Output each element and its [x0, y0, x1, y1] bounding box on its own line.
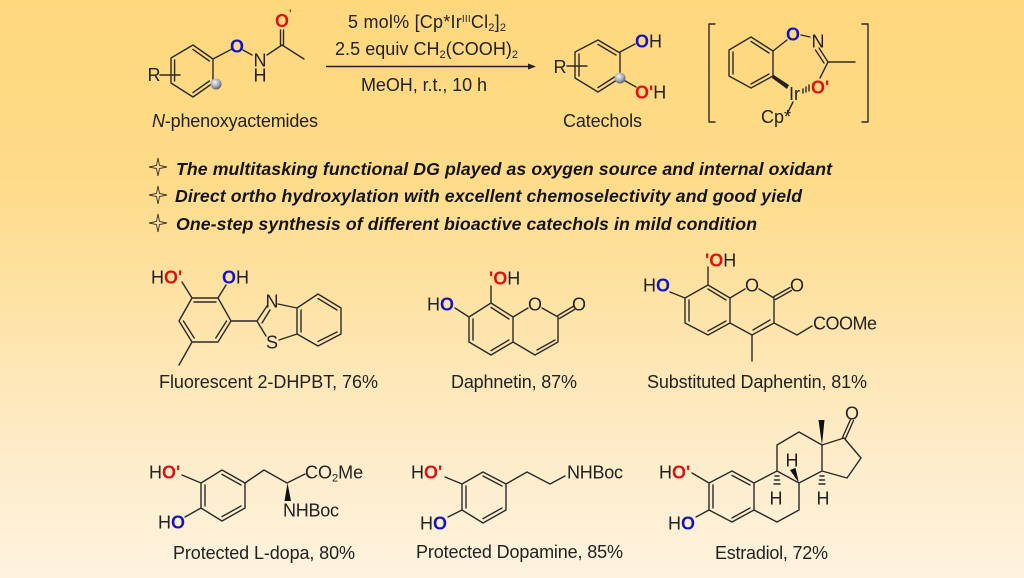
compound: protected L-dopa structure: [149, 462, 363, 532]
compound: estradiol derivative structure: HO: [668, 514, 695, 534]
compound: substituted daphnetin structure: COOMe: [813, 314, 877, 334]
compound: 2-DHPBT structure: [151, 268, 341, 365]
intermediate: bracketed iridacycle: Ir: [789, 84, 800, 104]
compound: protected L-dopa structure: Me: [338, 462, 363, 482]
compound: 2-DHPBT structure: HO': [151, 268, 182, 288]
arrow head: [528, 64, 536, 70]
intermediate: bracketed iridacycle: [709, 24, 868, 127]
key point 2: Direct ortho hydroxylation with excellent chemoselectivity and good yield: [175, 186, 803, 206]
product: catechol structure: R: [554, 57, 566, 77]
intermediate: bracketed iridacycle: O': [811, 78, 829, 98]
compound: estradiol derivative structure: H: [770, 488, 782, 508]
reaction conditions above arrow: ]: [495, 12, 500, 32]
compound: estradiol derivative structure: H: [786, 450, 798, 470]
compound: substituted daphnetin structure: HO: [643, 276, 670, 296]
compound: estradiol derivative structure: HO': [659, 462, 690, 482]
compound: estradiol derivative structure: O: [845, 404, 859, 424]
label: L-dopa yield: Protected L-dopa, 80%: [173, 543, 355, 563]
compound: protected L-dopa structure: NHBoc: [283, 500, 339, 520]
reactant: N-phenoxyacetamide structure: [148, 8, 304, 97]
reactant: N-phenoxyacetamide structure: ': [289, 8, 292, 20]
compound: 2-DHPBT structure: OH: [222, 268, 249, 288]
product: catechol structure: O'H: [635, 82, 666, 102]
intermediate: bracketed iridacycle: Cp*: [761, 107, 791, 127]
reaction conditions above arrow: Cl: [471, 12, 488, 32]
compound: protected L-dopa structure: HO': [149, 462, 180, 482]
compound: substituted daphnetin structure: O: [790, 276, 804, 296]
reactant: N-phenoxyacetamide structure: R: [148, 65, 160, 85]
compound: daphnetin structure: 'OH: [489, 268, 520, 288]
reaction conditions above arrow: III: [462, 14, 471, 25]
key point 1: The multitasking functional DG played as oxygen source and internal oxidant: [176, 159, 833, 179]
compound: protected dopamine structure: [411, 462, 623, 534]
compound: protected dopamine structure: HO': [411, 462, 442, 482]
label: daphnetin yield: Daphnetin, 87%: [451, 372, 577, 392]
key point 3: One-step synthesis of different bioactive catechols in mild condition: [176, 214, 757, 234]
reactant label: N-phenoxyactemides: [152, 111, 318, 131]
compound: substituted daphnetin structure: [643, 250, 877, 361]
reaction conditions above arrow: 2: [500, 22, 506, 34]
bullet: star 3: [149, 214, 167, 232]
key points list: [149, 158, 833, 234]
label: substituted daphnetin yield: Substituted Daphentin, 81%: [647, 372, 867, 392]
product: catechol structure: [554, 32, 666, 102]
product: catechol structure: OH: [635, 32, 662, 52]
compound: protected dopamine structure: NHBoc: [567, 462, 623, 482]
label: 2-DHPBT yield: Fluorescent 2-DHPBT, 76%: [159, 372, 378, 392]
compound: daphnetin structure: O: [528, 294, 542, 314]
reactant: N-phenoxyacetamide structure: O: [275, 11, 289, 31]
intermediate: bracketed iridacycle: O: [786, 24, 800, 44]
reagent line: 2.5 equiv CH: [335, 39, 439, 59]
compound: daphnetin structure: [427, 268, 586, 355]
compound: daphnetin structure: O: [572, 294, 586, 314]
bullet: star 1: [149, 158, 167, 176]
reaction arrow: [326, 66, 530, 68]
compound: daphnetin structure: HO: [427, 294, 454, 314]
conditions below arrow: MeOH, r.t., 10 h: [361, 75, 487, 95]
reagent line: 2: [440, 49, 446, 61]
reaction conditions above arrow: 5 mol% [Cp*Ir: [348, 12, 462, 32]
compound: 2-DHPBT structure: N: [266, 292, 278, 312]
compound: substituted daphnetin structure: O: [745, 276, 759, 296]
intermediate: bracketed iridacycle: N: [812, 32, 824, 52]
compound: protected dopamine structure: HO: [420, 514, 447, 534]
product label: Catechols: [563, 111, 642, 131]
compound: estradiol derivative structure: H: [816, 488, 830, 508]
label: estradiol yield: Estradiol, 72%: [715, 543, 828, 563]
reagent line: 2: [512, 49, 518, 61]
compound: substituted daphnetin structure: 'OH: [705, 250, 736, 270]
compound: estradiol derivative structure: [659, 404, 861, 534]
reactant: N-phenoxyacetamide structure: O: [230, 36, 244, 56]
bullet: star 2: [149, 186, 167, 204]
compound: protected L-dopa structure: HO: [158, 512, 185, 532]
reactant: N-phenoxyacetamide structure: H: [254, 66, 266, 86]
compound: 2-DHPBT structure: S: [266, 332, 278, 352]
compound: protected L-dopa structure: CO: [305, 462, 332, 482]
reagent line: (COOH): [446, 39, 512, 59]
reactant: N-phenoxyacetamide structure: N: [254, 50, 266, 70]
compound: protected L-dopa structure: 2: [332, 472, 338, 484]
label: dopamine yield: Protected Dopamine, 85%: [416, 542, 623, 562]
reaction conditions above arrow: 2: [488, 22, 494, 34]
